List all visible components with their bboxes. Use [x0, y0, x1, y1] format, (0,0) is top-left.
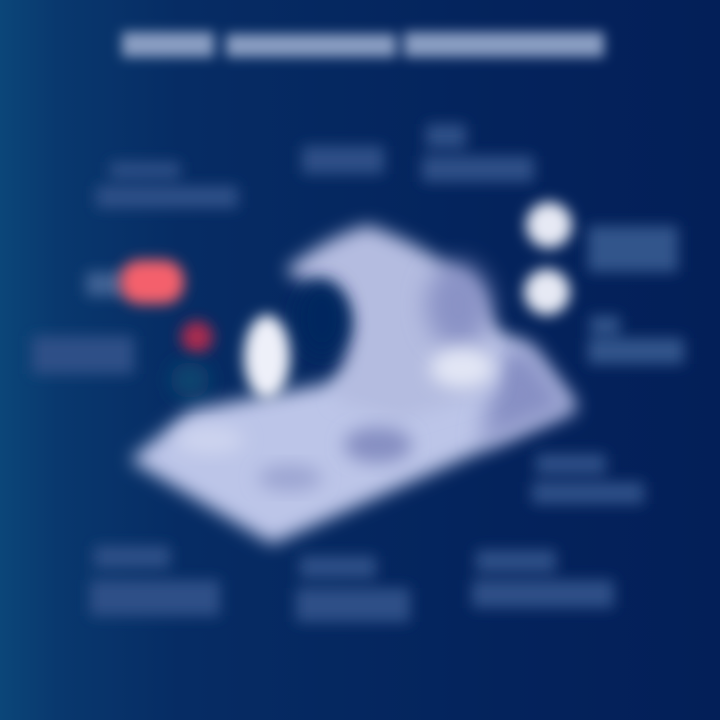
mountain arch	[285, 225, 498, 420]
white figure	[244, 315, 290, 399]
text block: beside red badge	[86, 272, 126, 296]
icon: white circle lower	[524, 269, 570, 315]
central isometric illustration	[130, 225, 578, 544]
icon: red badge	[120, 260, 184, 304]
icon: dark red marker	[181, 321, 213, 353]
text block: bottom centre	[296, 556, 410, 622]
text block: left middle	[32, 336, 134, 374]
arch opening	[296, 280, 348, 356]
platform right side	[480, 350, 572, 445]
text block: right middle	[588, 316, 684, 364]
platform light patch	[176, 426, 244, 454]
platform shadow patch left	[258, 465, 322, 491]
text block: right upper	[588, 226, 678, 272]
text block: top right	[422, 124, 534, 182]
platform base	[130, 320, 578, 544]
text block: right lower	[532, 454, 644, 504]
icon: teal marker	[170, 362, 210, 398]
text block: top centre	[302, 146, 384, 174]
text block: bottom right	[472, 550, 614, 608]
text block: upper left	[96, 162, 238, 208]
platform highlight	[430, 348, 494, 388]
icon: white circle upper	[526, 202, 572, 248]
platform shadow patch	[344, 427, 412, 463]
arch shaded side	[426, 263, 490, 347]
text block: bottom left	[90, 546, 220, 616]
title	[122, 32, 604, 57]
